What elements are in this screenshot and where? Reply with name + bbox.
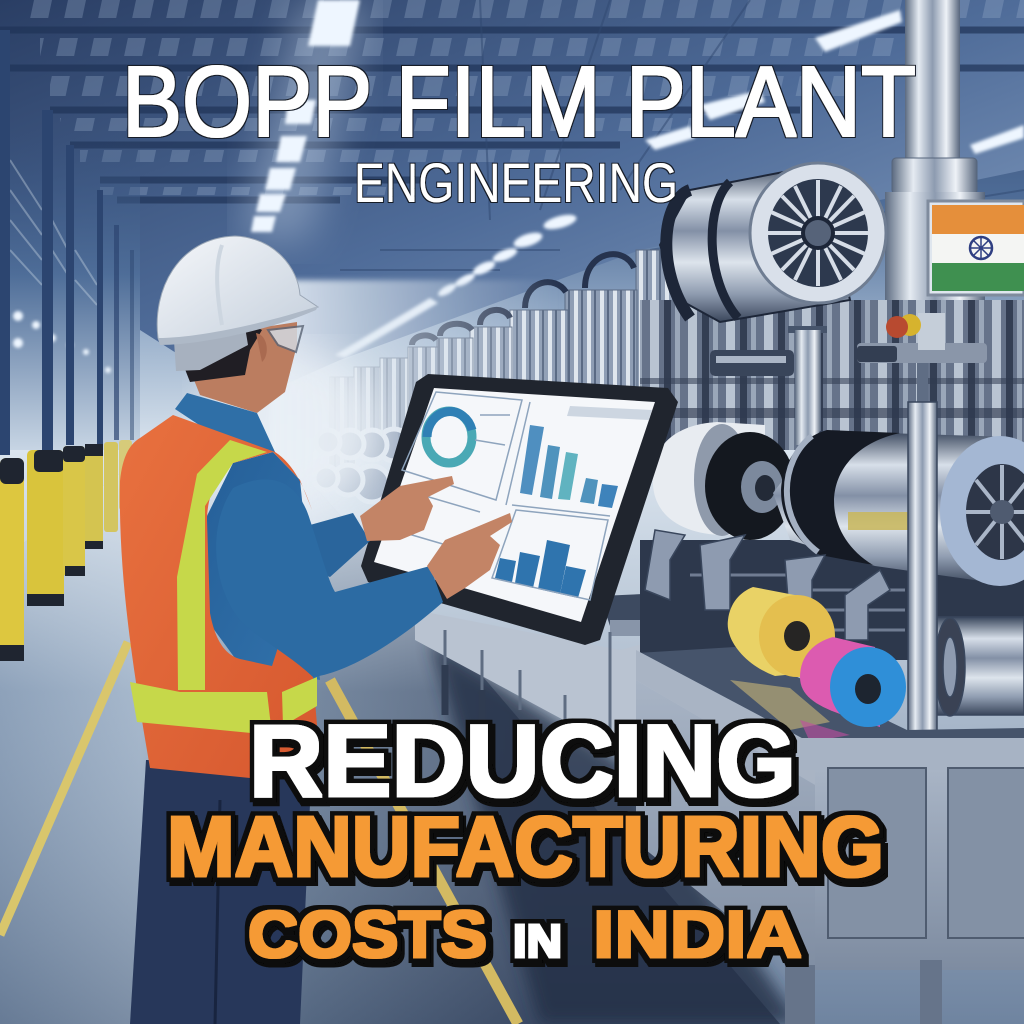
- left wall columns: [0, 30, 134, 455]
- steel film roll: [773, 430, 1024, 586]
- headline: costs: COSTS: [248, 897, 487, 971]
- haze over distant machines: [270, 280, 560, 530]
- supports: [645, 402, 1024, 733]
- yellow film roll: [728, 587, 835, 677]
- right machinery: [636, 0, 1024, 1024]
- white film roll: [653, 422, 795, 540]
- floor: [0, 470, 800, 1024]
- bar chart bottom: [495, 540, 586, 598]
- red stop button: [857, 313, 987, 363]
- orange safety vest: [120, 415, 317, 778]
- ceiling: [0, 0, 1024, 400]
- headline: in: IN: [513, 915, 562, 967]
- pink and blue film roll: [800, 637, 906, 727]
- table and cabinet: [636, 647, 1024, 1024]
- worker: [120, 236, 512, 1024]
- headline: reducing: REDUCING: [249, 704, 796, 818]
- subheading: engineering: ENGINEERING: [354, 151, 678, 214]
- ceiling lights: [13, 0, 1024, 373]
- machine base under tablet: [415, 590, 730, 770]
- left wall with racks: [0, 130, 140, 450]
- bar chart top: [520, 425, 618, 508]
- headline: manufacturing: MANUFACTURING: [167, 800, 884, 895]
- light glow: [240, 0, 370, 240]
- collar: [175, 393, 275, 452]
- headline: india: INDIA: [593, 897, 802, 971]
- hands: [360, 476, 512, 599]
- far arm: [310, 513, 370, 577]
- tablet with dashboard: [361, 374, 678, 645]
- trousers: [130, 760, 312, 1024]
- vertical columns and pipes: [640, 0, 1024, 660]
- large upper film roll: [660, 163, 886, 322]
- near arm and sleeve: [216, 479, 443, 677]
- dashboard panel outlines: [395, 392, 610, 600]
- background machinery row: [200, 250, 730, 770]
- neck and head: [174, 322, 303, 413]
- floor yellow lines: [0, 642, 128, 935]
- hard hat: [157, 236, 318, 345]
- indian flag: [928, 201, 1024, 295]
- film spools in distance: [314, 429, 410, 502]
- headline block: [167, 704, 884, 971]
- heading: BOPP FILM PLANT: BOPP FILM PLANT: [122, 46, 916, 158]
- yellow bollards: [0, 440, 132, 661]
- donut chart: [426, 411, 472, 463]
- torso shirt: [205, 452, 320, 680]
